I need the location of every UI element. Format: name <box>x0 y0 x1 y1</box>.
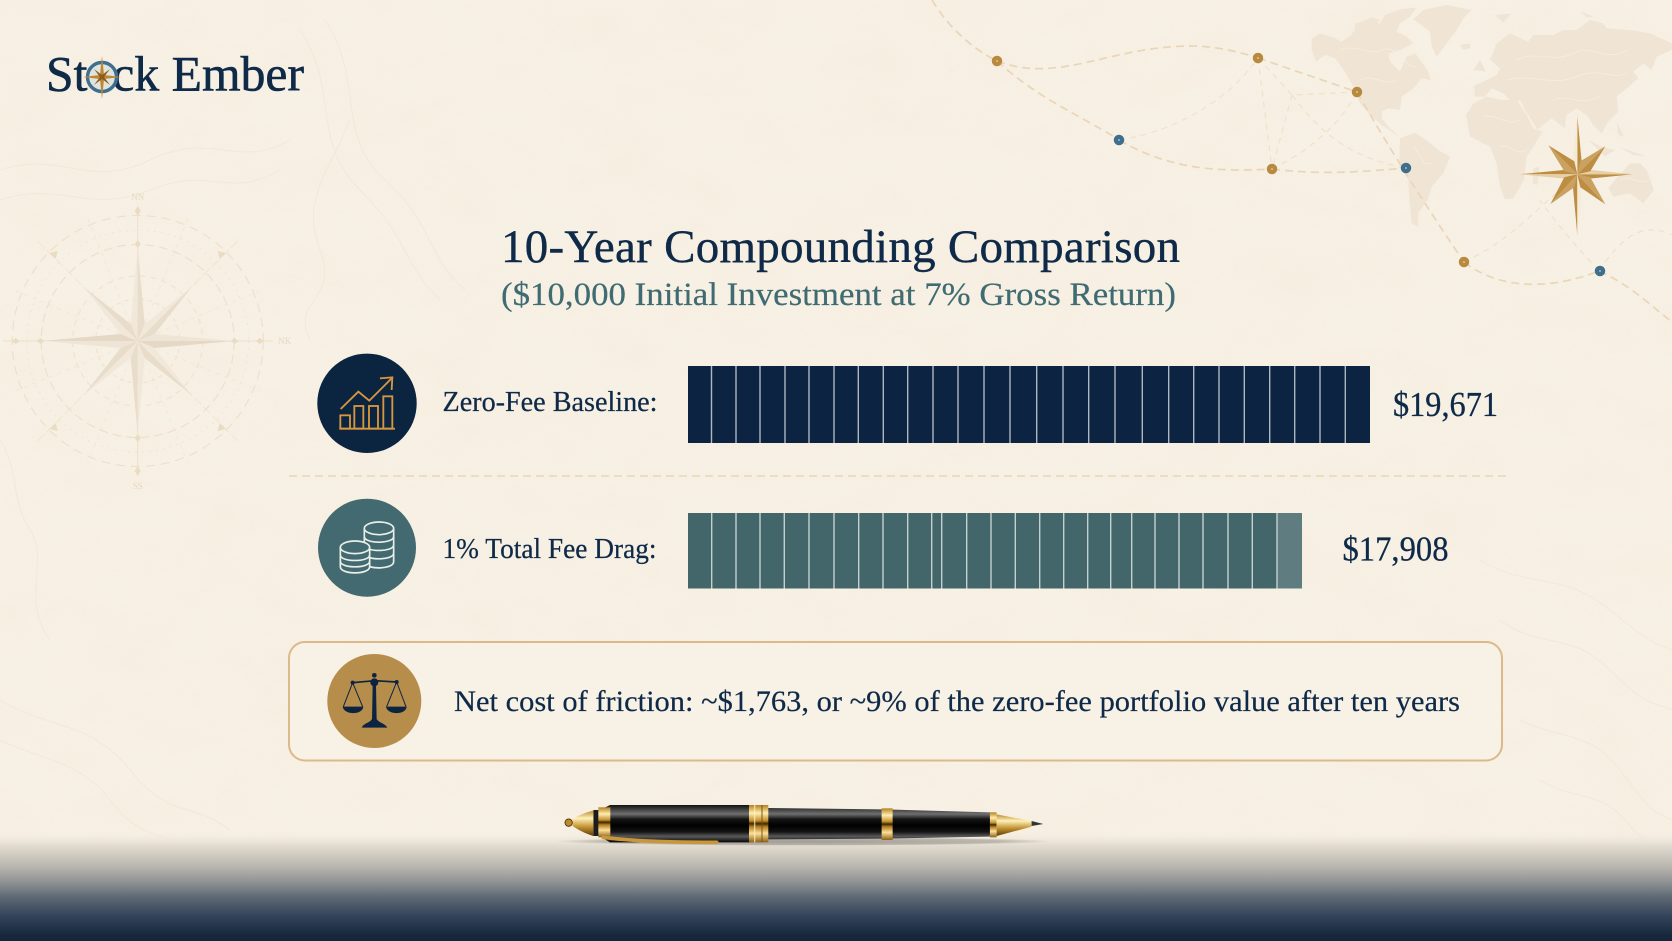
illustration: fountain pen <box>555 805 1052 846</box>
row: 1% total fee drag <box>318 499 1448 597</box>
icon: balance scales on gold circle <box>327 654 421 748</box>
title: 10-Year Compounding Comparison <box>501 221 1180 273</box>
subtitle: ($10,000 Initial Investment at 7% Gross Return) <box>501 277 1176 313</box>
value: $19,671: $19,671 <box>1393 385 1498 424</box>
divider <box>289 475 1507 477</box>
pen barrel <box>603 805 990 842</box>
pen tip <box>997 814 1043 836</box>
icon: faint compass rose: NN <box>131 192 145 202</box>
icon: gold compass star <box>1519 115 1633 235</box>
label: 1% total fee drag: 1% Total Fee Drag: <box>442 534 656 565</box>
bar: zero-fee baseline <box>688 366 1370 443</box>
icon: faint compass rose <box>3 192 292 491</box>
logo: Stock Ember: Stock Ember <box>46 46 304 102</box>
icon: coin stacks on teal circle <box>318 499 416 597</box>
pen clip <box>603 837 717 842</box>
label: zero-fee baseline: Zero-Fee Baseline: <box>442 387 658 418</box>
route node markers <box>994 55 1603 274</box>
pen gold bands <box>593 805 997 842</box>
icon: growth chart on navy circle <box>317 354 417 453</box>
icon: logo compass <box>83 56 121 99</box>
world map watermark <box>1312 5 1672 227</box>
bar: 1% total fee drag <box>688 513 1302 588</box>
callout text: Net cost of friction: ~$1,763, or ~9% of the zero-fee portfolio value after ten years <box>454 686 1460 718</box>
callout: net cost of friction <box>289 642 1502 760</box>
bottom navy gradient band <box>0 830 1672 941</box>
pen left finial <box>565 811 593 836</box>
row: zero-fee baseline <box>317 354 1498 453</box>
route network <box>932 0 1672 322</box>
value: $17,908: $17,908 <box>1342 530 1448 568</box>
icon: faint compass rose: NK <box>278 336 292 346</box>
icon: faint compass rose: SS <box>133 481 143 491</box>
